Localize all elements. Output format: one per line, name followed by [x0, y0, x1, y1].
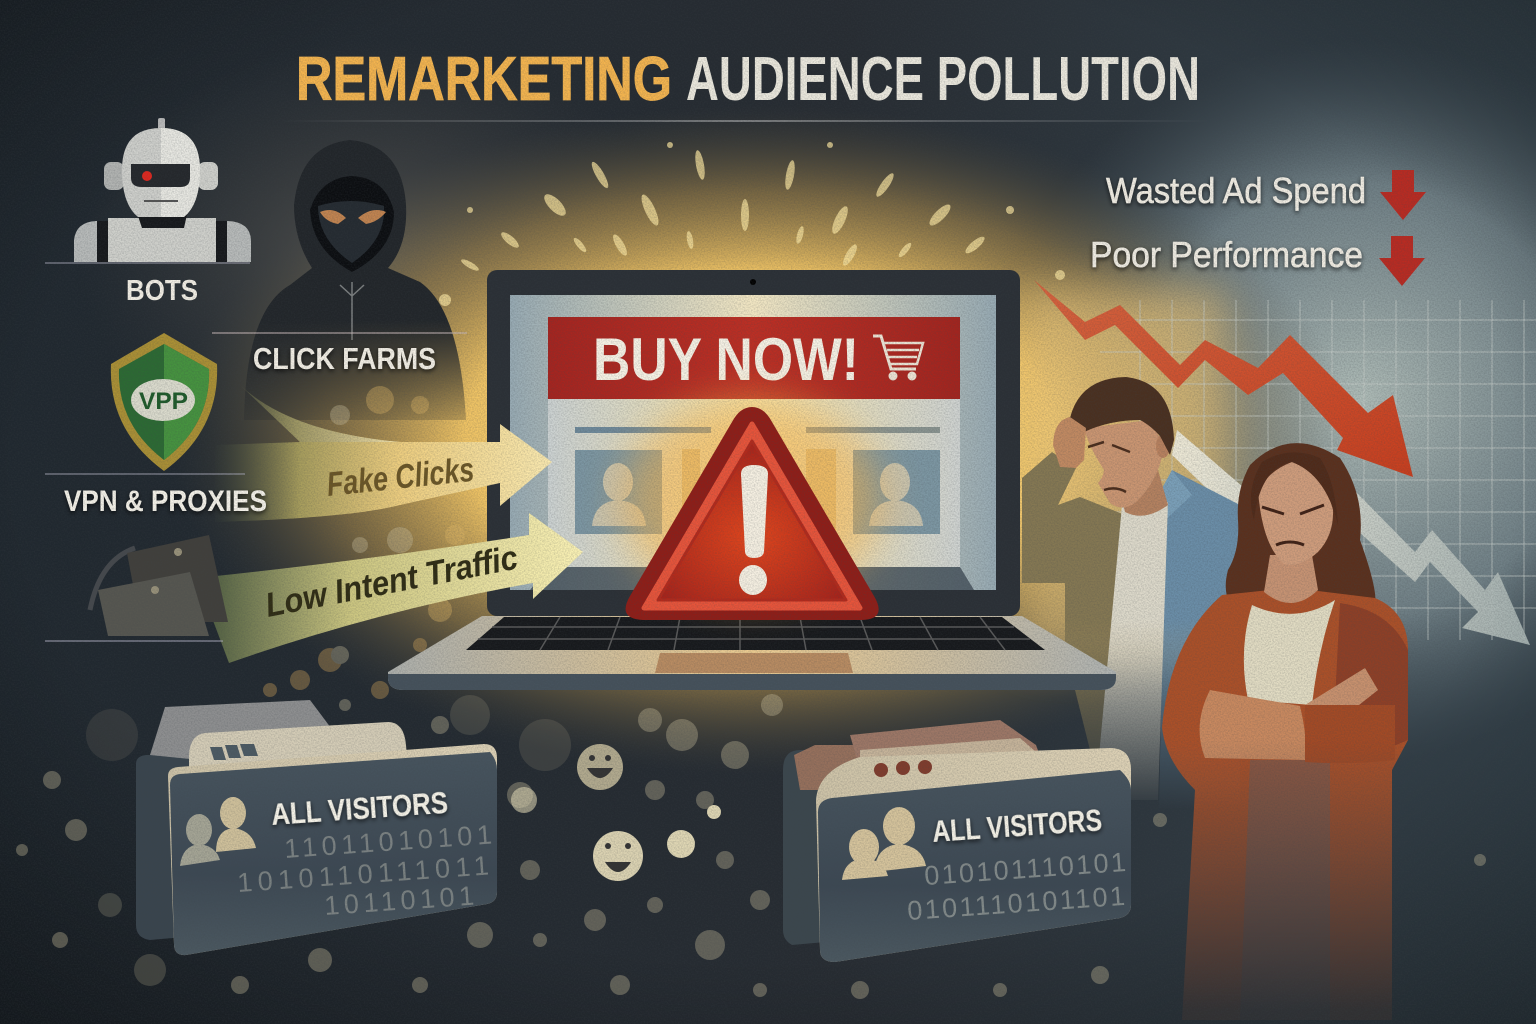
- binary text: [906, 847, 1127, 926]
- folder: right: ALL VISITORS: [931, 802, 1103, 849]
- title: AUDIENCE POLLUTION: [686, 45, 1200, 114]
- laptop lid: [487, 270, 1020, 616]
- binary text: 10110101: [323, 881, 475, 921]
- warning triangle: [626, 407, 879, 620]
- icon: robot: [74, 118, 251, 262]
- icon: cart: [873, 336, 923, 379]
- face: [1258, 462, 1333, 565]
- label: vpn and proxies: VPN & PROXIES: [64, 485, 267, 518]
- metric: wasted ad spend: Wasted Ad Spend: [1106, 170, 1366, 211]
- crossed arms: [1200, 690, 1306, 760]
- metric: poor performance: Poor Performance: [1090, 234, 1363, 275]
- icon: hooded figure: [244, 140, 466, 420]
- arrow: low intent traffic: Low Intent Traffic: [262, 539, 521, 625]
- light burst: [439, 142, 1065, 306]
- trackpad: [655, 653, 853, 673]
- hair back: [1226, 443, 1375, 615]
- icon: users: [842, 807, 926, 880]
- icon: down arrow: [1379, 236, 1425, 286]
- arrow: low intent traffic: [197, 513, 583, 663]
- label: bots: BOTS: [126, 275, 198, 307]
- person: woman: [1162, 443, 1408, 1020]
- binary text: [236, 820, 493, 921]
- buy now banner: [548, 317, 960, 399]
- shirt: [1160, 470, 1238, 794]
- warning glow: [622, 400, 882, 600]
- buy now banner: BUY NOW!: [593, 326, 859, 393]
- white declining arrow: [1172, 430, 1530, 645]
- person: man: [1022, 377, 1238, 800]
- icon: smiley top: [577, 744, 623, 790]
- arrow: fake clicks: Fake Clicks: [325, 451, 476, 504]
- folder: left: [136, 700, 497, 955]
- icon: vpn shield: [111, 333, 217, 471]
- icon: down arrow: [1380, 170, 1426, 220]
- exclamation mark: [741, 465, 768, 558]
- tee: [1095, 502, 1168, 800]
- binary text: 1010110111011: [236, 850, 490, 898]
- keyboard base: [388, 616, 1116, 690]
- folder: right: [783, 720, 1131, 962]
- red declining arrow: [1034, 280, 1413, 477]
- laptop: [388, 270, 1116, 690]
- arrow: fake clicks: [215, 385, 552, 522]
- profile card right: [853, 450, 940, 534]
- neck: [1264, 555, 1318, 603]
- bokeh particles: [16, 386, 1486, 999]
- face: [1084, 420, 1164, 508]
- chart grid: [1100, 300, 1536, 640]
- metric: poor performance: [1090, 234, 1425, 286]
- small glowing dots: [511, 787, 721, 858]
- binary text: 010101110101: [923, 847, 1127, 891]
- title: REMARKETING: [296, 45, 672, 114]
- tee: [1244, 600, 1335, 705]
- title: [280, 45, 1210, 122]
- hair front: [1251, 452, 1338, 525]
- icon: smiley bottom: [593, 831, 643, 881]
- neck: [1122, 470, 1168, 516]
- folder: left: ALL VISITORS: [270, 785, 449, 832]
- page panel: [548, 398, 960, 567]
- icon: server devices: [45, 535, 228, 642]
- profile card left: [575, 450, 662, 534]
- binary text: 11011010101: [283, 820, 493, 864]
- icon: vpn shield: VPP: [139, 388, 188, 415]
- ear: [1156, 436, 1169, 458]
- label: click farms: CLICK FARMS: [253, 341, 436, 376]
- binary text: 0101110101101: [906, 881, 1126, 926]
- keyboard: [466, 617, 1045, 650]
- hair: [1070, 377, 1174, 455]
- icon: users: [180, 797, 256, 866]
- hand: [1053, 417, 1086, 468]
- laptop screen: [510, 295, 996, 590]
- jacket: [1022, 452, 1122, 749]
- cardigan: [1162, 590, 1408, 1020]
